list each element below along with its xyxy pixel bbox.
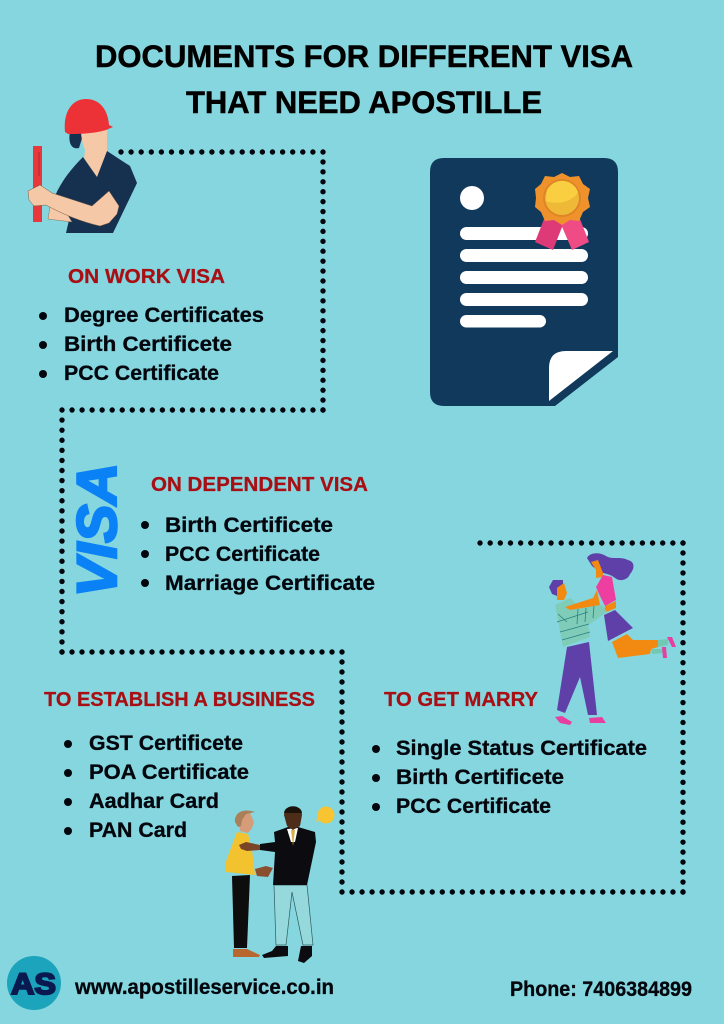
list: marriage documents: Single Status Certificate — [396, 736, 647, 760]
panel: get marry text — [372, 689, 647, 818]
list: business documents — [64, 731, 249, 842]
footer: website: www.apostilleservice.co.in — [74, 976, 334, 999]
heading: to establish a business: TO ESTABLISH A BUSINESS — [44, 689, 315, 711]
list: marriage documents: Birth Certificete — [396, 765, 564, 789]
heading: on dependent visa: ON DEPENDENT VISA — [151, 474, 368, 496]
footer: logo badge: AS — [11, 968, 56, 1001]
heading: on work visa: ON WORK VISA — [68, 266, 225, 288]
list: dependent visa documents: Marriage Certificate — [165, 571, 375, 595]
title: THAT NEED APOSTILLE — [186, 84, 542, 120]
dotted connector path — [62, 152, 683, 892]
list: business documents: Aadhar Card — [89, 789, 219, 813]
footer: phone: Phone: 7406384899 — [510, 978, 692, 1001]
list: marriage documents: PCC Certificate — [396, 794, 551, 818]
list: work visa documents — [39, 303, 264, 385]
panel: work visa text — [39, 266, 264, 385]
list: business documents: PAN Card — [89, 818, 187, 842]
icon: visa logo: VISA — [65, 463, 128, 597]
icon: construction worker — [28, 99, 137, 233]
panel: establish a business text — [44, 689, 315, 842]
list: work visa documents: PCC Certificate — [64, 361, 219, 385]
list: work visa documents: Birth Certificete — [64, 332, 232, 356]
list: business documents: GST Certificete — [89, 731, 243, 755]
title — [95, 38, 633, 120]
title: DOCUMENTS FOR DIFFERENT VISA — [95, 38, 633, 74]
heading: to get marry: TO GET MARRY — [384, 689, 539, 711]
list: business documents: POA Certificate — [89, 760, 249, 784]
list: dependent visa documents: PCC Certificate — [165, 542, 320, 566]
list: marriage documents — [372, 736, 647, 818]
icon: certificate document with ribbon — [430, 158, 618, 406]
icon: business handshake — [225, 806, 334, 963]
panel: dependent visa text — [141, 474, 375, 595]
footer: logo badge — [7, 956, 61, 1010]
list: dependent visa documents — [141, 513, 375, 595]
list: dependent visa documents: Birth Certificete — [165, 513, 333, 537]
icon: couple embracing — [549, 553, 676, 725]
list: work visa documents: Degree Certificates — [64, 303, 264, 327]
